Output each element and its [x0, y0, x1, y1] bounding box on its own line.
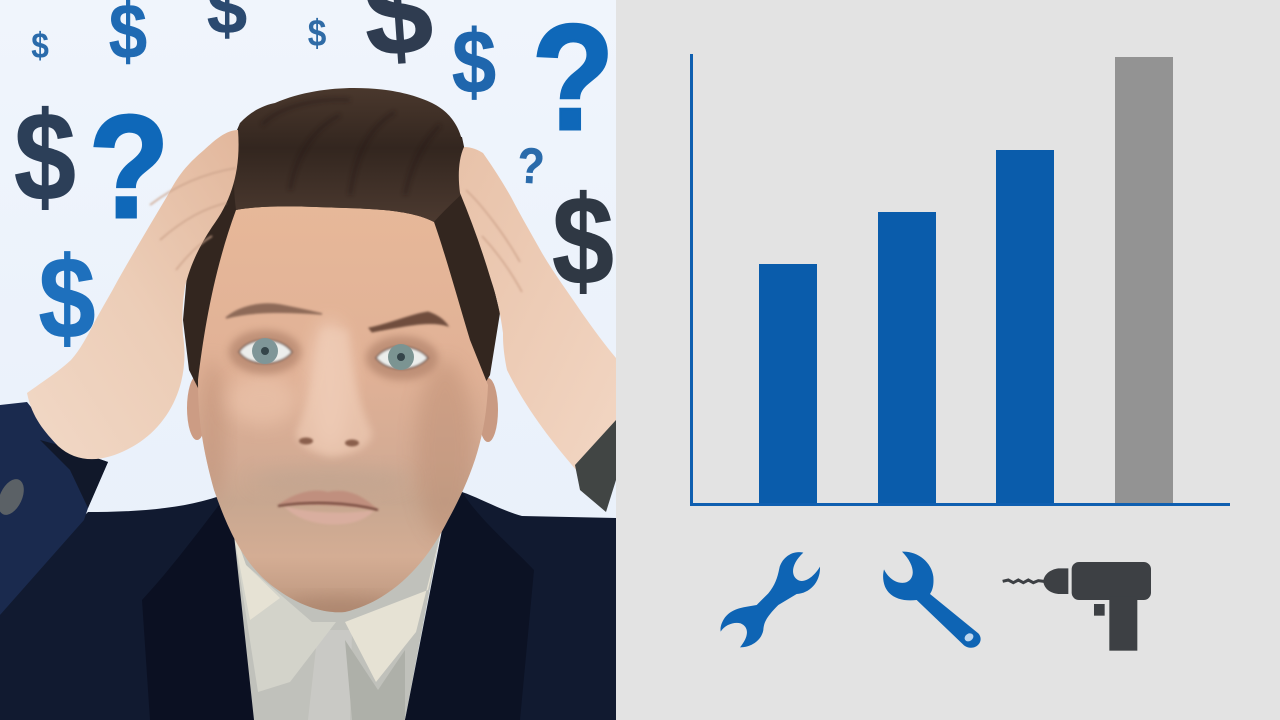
left hand	[27, 130, 239, 459]
shirt and collar	[232, 525, 442, 720]
floating dollar and question marks: $	[452, 11, 496, 112]
drill body	[1072, 562, 1151, 600]
face shading	[415, 360, 475, 540]
icon: wrench two	[883, 552, 981, 648]
panel: left photo	[0, 0, 616, 720]
sleeve button	[0, 479, 24, 515]
floating dollar and question marks: ?	[89, 86, 169, 249]
bar: grey highest	[1115, 57, 1173, 504]
right eye	[376, 344, 428, 370]
floating dollar and question marks	[14, 0, 614, 363]
floating dollar and question marks: ?	[516, 137, 546, 194]
icon: power drill	[1003, 562, 1151, 651]
eye sockets	[229, 330, 301, 374]
floating dollar and question marks: $	[14, 87, 76, 228]
floating dollar and question marks: $	[552, 171, 614, 312]
nose	[296, 330, 372, 456]
drill bit	[1003, 580, 1044, 583]
icon: wrench one	[721, 552, 820, 647]
face	[190, 200, 500, 622]
floating dollar and question marks: $	[308, 12, 326, 54]
left eye	[239, 338, 292, 364]
eyebrows	[226, 304, 322, 318]
bar chart	[692, 54, 1230, 504]
hair strands	[264, 98, 409, 192]
bar: third year	[996, 150, 1054, 504]
panel: right chart background	[616, 0, 1280, 720]
jacket	[0, 402, 616, 720]
bar: first year	[759, 264, 817, 504]
drill chuck	[1043, 568, 1068, 594]
wristwatch	[575, 420, 616, 512]
floating dollar and question marks: $	[31, 26, 49, 66]
drill trigger	[1094, 604, 1105, 616]
hair top	[234, 88, 466, 222]
bar: second year	[878, 212, 936, 504]
mouth	[278, 491, 378, 525]
chart axes	[692, 54, 1230, 504]
hair back	[183, 123, 500, 392]
drill handle	[1109, 597, 1137, 651]
ears	[187, 376, 498, 442]
floating dollar and question marks: $	[39, 234, 95, 363]
right hand	[459, 147, 616, 472]
